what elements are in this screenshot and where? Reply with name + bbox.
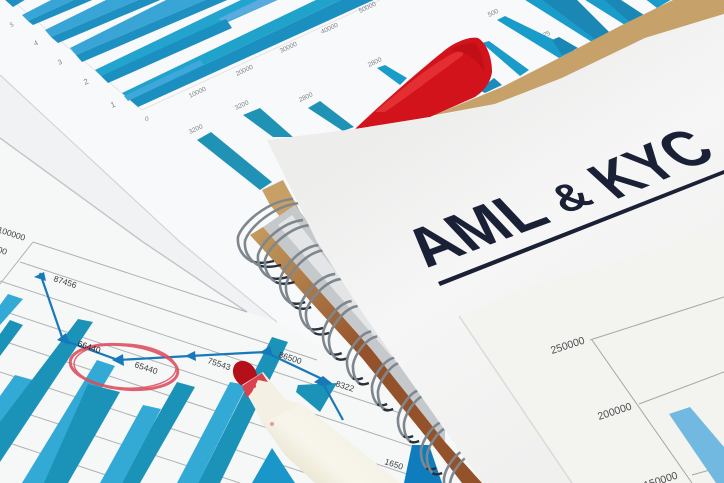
axis labels: 500 xyxy=(487,8,500,19)
chart value labels: 65440 xyxy=(133,359,159,376)
marker neck xyxy=(242,372,300,424)
chart value labels: 86500 xyxy=(277,349,303,366)
chart value labels: 66440 xyxy=(76,338,102,355)
axis labels: 3200 xyxy=(234,99,250,112)
marker body xyxy=(260,402,400,483)
title: AML & KYC: & xyxy=(539,173,602,221)
bar chart: vertical dark-teal bars xyxy=(197,0,674,190)
chart value labels: 75543 xyxy=(206,355,232,372)
chart value labels xyxy=(0,224,405,472)
red hand-drawn circle xyxy=(68,339,180,395)
axis lines xyxy=(0,0,380,110)
axis labels: 2 xyxy=(82,77,90,87)
axis labels: 3 xyxy=(57,59,63,67)
axis labels: 30000 xyxy=(279,41,299,55)
panel: bottom chart sheet xyxy=(0,75,480,483)
kraft notebook corner xyxy=(262,180,330,267)
axis labels xyxy=(9,1,552,136)
title: AML & KYC xyxy=(388,118,724,278)
title: AML & KYC: AML xyxy=(388,180,563,278)
axis labels: 2800 xyxy=(367,56,383,69)
axis labels: 200000 xyxy=(596,401,633,423)
brown board strip xyxy=(250,227,482,483)
panel: top bar chart sheet xyxy=(0,0,674,190)
axis labels: 175 xyxy=(539,30,552,41)
silver binding tube xyxy=(263,205,445,442)
chart value labels: 8322 xyxy=(334,378,356,394)
kraft folder xyxy=(430,0,724,116)
marker pen xyxy=(228,356,400,483)
chart grid lines xyxy=(0,242,420,483)
spiral notebook xyxy=(238,180,482,483)
line chart with markers xyxy=(34,272,343,420)
axis labels: 1 xyxy=(109,100,117,110)
panel: overlapping chart sheet xyxy=(459,229,724,483)
axis labels: 10000 xyxy=(188,86,208,100)
marker tip xyxy=(228,356,262,392)
title underline xyxy=(438,170,724,286)
bar chart: horizontal blue bars xyxy=(3,0,378,107)
chart bar xyxy=(669,407,724,483)
axis labels: 50000 xyxy=(358,1,378,15)
red marker cap xyxy=(355,38,492,129)
axis labels: 4 xyxy=(33,40,39,48)
axis labels: 3200 xyxy=(188,123,204,136)
chart value labels: 87456 xyxy=(52,273,78,290)
panel: AML and KYC paper xyxy=(267,14,724,483)
axis labels xyxy=(549,335,679,483)
axis labels: 2800 xyxy=(298,91,314,104)
axis labels: 40000 xyxy=(320,22,340,36)
bar chart: bottom-left blue bars xyxy=(0,294,442,483)
axis labels: 250000 xyxy=(549,335,586,357)
chart axes xyxy=(590,297,724,483)
binding rings xyxy=(238,199,473,483)
axis labels: 20000 xyxy=(235,64,255,78)
chart value labels: 1650 xyxy=(383,456,405,472)
red ink stains xyxy=(242,373,274,426)
axis labels: 0 xyxy=(145,116,149,123)
axis labels: 5 xyxy=(9,22,15,29)
